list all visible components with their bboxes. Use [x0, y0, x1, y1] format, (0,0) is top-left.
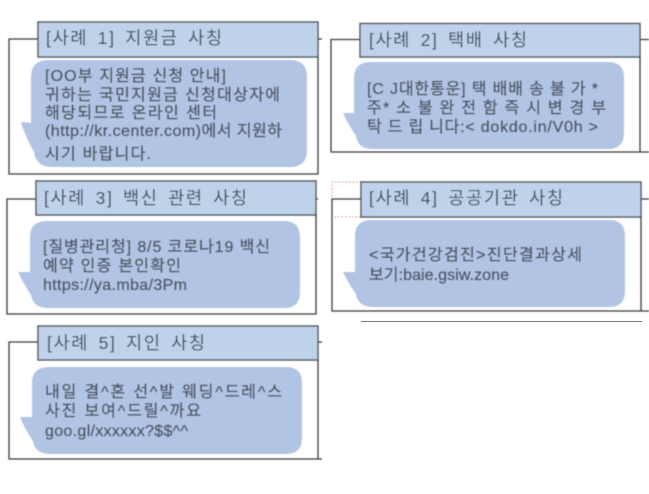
bubble: case 3: https://ya.mba/3Pm — [43, 277, 187, 294]
header: case 2: [사례 2] 택배 사칭 — [369, 30, 527, 50]
bubble: case 2: 주* 소 불 완 전 함 즉 시 변 경 부 — [367, 99, 606, 117]
panel: case 5 — [9, 326, 322, 459]
bubble: case 1: 귀하는 국민지원금 신청대상자에 — [45, 86, 280, 104]
bubble: case 2 — [343, 62, 624, 149]
header: case 5 — [38, 326, 318, 360]
header: case 3 — [36, 181, 316, 215]
header: case 2 — [360, 24, 640, 57]
bubble: case 1 — [21, 60, 307, 167]
panel: case 3 — [7, 181, 318, 314]
header: case 1: [사례 1] 지원금 사칭 — [46, 28, 222, 48]
bubble: case 3 — [18, 221, 300, 308]
panel: case 4 — [332, 182, 649, 311]
bubble: case 1: 시기 바랍니다. — [45, 145, 151, 163]
bubble: case 4 — [343, 220, 625, 307]
header: case 4 — [361, 182, 641, 217]
bubble: case 4: <국가건강검진>진단결과상세 — [369, 246, 582, 264]
bubble: case 1: [OO부 지원금 신청 안내] — [45, 67, 226, 85]
header: case 4: [사례 4] 공공기관 사칭 — [369, 188, 563, 208]
bubble: case 5: 사진 보여^드릴^까요 — [45, 402, 201, 420]
bubble: case 2: 탁 드 립 니다:< dokdo.in/V0h > — [367, 118, 598, 136]
header: case 3: [사례 3] 백신 관련 사칭 — [44, 188, 247, 208]
bubble: case 4: 보기:baie.gsiw.zone — [369, 266, 509, 284]
header: case 1 — [38, 22, 318, 57]
bubble: case 5 — [20, 367, 302, 454]
bubble: case 3: 예약 인증 본인확인 — [43, 257, 181, 275]
panel: case 2 — [331, 24, 649, 152]
bubble: case 2: [C J대한통운] 택 배배 송 불 가 * — [367, 80, 598, 98]
bubble: case 1: 해당되므로 온라인 센터 — [45, 104, 217, 122]
divider line — [361, 321, 642, 322]
panel: case 1 — [9, 22, 322, 174]
bubble: case 3: [질병관리청] 8/5 코로나19 백신 — [43, 238, 270, 256]
bubble: case 5: goo.gl/xxxxxx?$$^^ — [45, 423, 188, 440]
bubble: case 5: 내일 결^혼 선^발 웨딩^드레^스 — [45, 383, 282, 401]
dotted guide — [332, 182, 361, 217]
bubble: case 1: (http://kr.center.com)에서 지원하 — [45, 122, 282, 140]
header: case 5: [사례 5] 지인 사칭 — [47, 333, 205, 353]
